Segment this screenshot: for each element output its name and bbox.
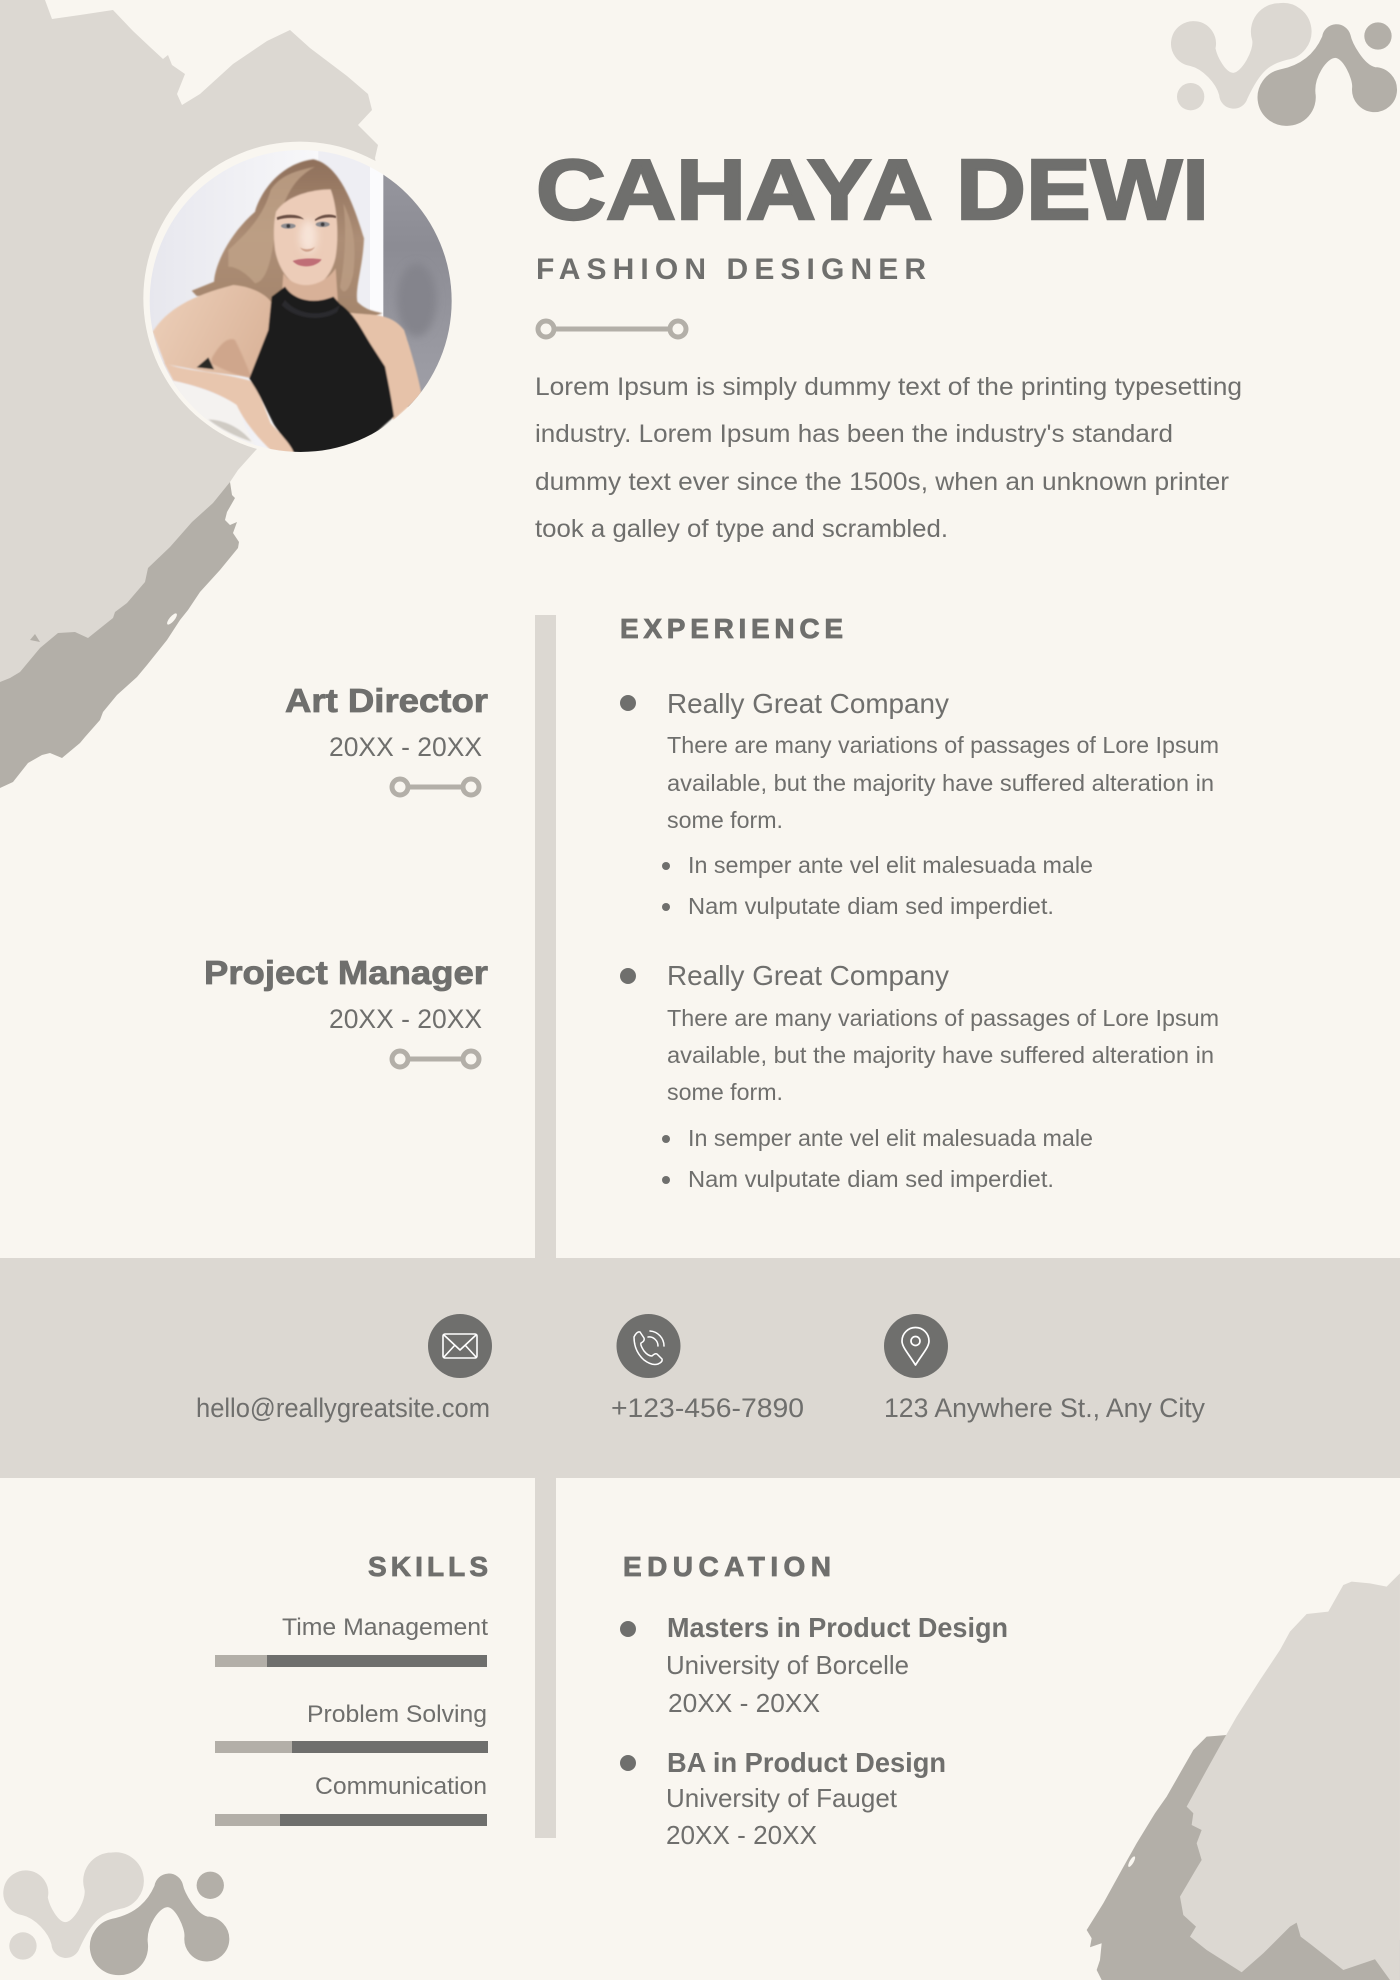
- contact: address: 123 Anywhere St., Any City: [884, 1393, 1206, 1423]
- skill: communication: Communication: [315, 1773, 487, 1800]
- photo: portrait in circle: [140, 140, 460, 460]
- skill: time management: [215, 1614, 488, 1667]
- experience item 1: available, but the majority have suffered alteration in: [667, 770, 1214, 796]
- education item 1: University of Borcelle: [666, 1650, 909, 1680]
- heading: education: EDUCATION: [623, 1551, 831, 1582]
- contact: phone: +123-456-7890: [611, 1393, 804, 1423]
- subtitle: job title: FASHION DESIGNER: [536, 253, 926, 286]
- experience item 2: available, but the majority have suffered alteration in: [667, 1042, 1214, 1068]
- title: name: CAHAYA DEWI: [536, 143, 1209, 238]
- education item 2: 20XX - 20XX: [666, 1820, 817, 1850]
- vertical divider: lower: [535, 1476, 556, 1838]
- timeline: art director: Art Director: [285, 682, 488, 719]
- education item 2: University of Fauget: [666, 1783, 898, 1813]
- text block: profile summary: took a galley of type and scrambled.: [535, 515, 948, 543]
- experience item 2: some form.: [667, 1079, 783, 1105]
- timeline: project manager: 20XX - 20XX: [329, 1004, 482, 1034]
- vertical divider: upper: [535, 615, 556, 1260]
- skill: time management: Time Management: [282, 1614, 488, 1641]
- text block: profile summary: industry. Lorem Ipsum has been the industry's standard: [535, 420, 1173, 448]
- education item 1: [620, 1612, 1008, 1718]
- experience item 1: Really Great Company: [667, 688, 949, 719]
- timeline: art director: [285, 682, 488, 795]
- education item 1: 20XX - 20XX: [668, 1688, 820, 1718]
- experience item 2: [620, 960, 1219, 1192]
- contact: email: [196, 1314, 492, 1423]
- timeline: art director: 20XX - 20XX: [329, 732, 482, 762]
- contact: email: hello@reallygreatsite.com: [196, 1393, 490, 1423]
- panel: contact band: [0, 1258, 1400, 1478]
- skill: communication: [215, 1773, 487, 1826]
- experience item 1: Nam vulputate diam sed imperdiet.: [688, 893, 1054, 919]
- timeline: project manager: Project Manager: [204, 954, 488, 991]
- skill: problem solving: Problem Solving: [307, 1701, 487, 1728]
- skill: problem solving: [215, 1701, 488, 1753]
- education item 1: Masters in Product Design: [667, 1612, 1008, 1643]
- experience item 2: In semper ante vel elit malesuada male: [688, 1125, 1093, 1151]
- brush: bottom-right strokes: [1087, 1573, 1400, 1980]
- text block: profile summary: Lorem Ipsum is simply dummy text of the printing typesetting: [535, 373, 1242, 401]
- timeline: project manager: [204, 954, 488, 1067]
- text block: profile summary: dummy text ever since the 1500s, when an unknown printer: [535, 468, 1229, 496]
- decoration: bottom-left blobs: [4, 1853, 229, 1975]
- experience item 1: In semper ante vel elit malesuada male: [688, 852, 1093, 878]
- decoration: top-right blobs: [1172, 3, 1397, 125]
- contact: address: [884, 1314, 1206, 1423]
- education item 2: BA in Product Design: [667, 1747, 946, 1778]
- experience item 1: [620, 688, 1219, 919]
- contact: phone: [611, 1314, 804, 1423]
- experience item 2: There are many variations of passages of Lore Ipsum: [667, 1005, 1219, 1031]
- experience item 2: Nam vulputate diam sed imperdiet.: [688, 1166, 1054, 1192]
- experience item 1: some form.: [667, 807, 783, 833]
- experience item 1: There are many variations of passages of Lore Ipsum: [667, 732, 1219, 758]
- text block: profile summary: [535, 373, 1242, 543]
- connector: under subtitle: [538, 321, 686, 337]
- brush: top-left light stroke: [0, 0, 400, 682]
- heading: experience: EXPERIENCE: [620, 613, 843, 644]
- heading: skills: SKILLS: [368, 1551, 488, 1582]
- education item 2: [620, 1747, 946, 1850]
- brush: top-left dark stroke: [0, 482, 239, 788]
- experience item 2: Really Great Company: [667, 960, 949, 991]
